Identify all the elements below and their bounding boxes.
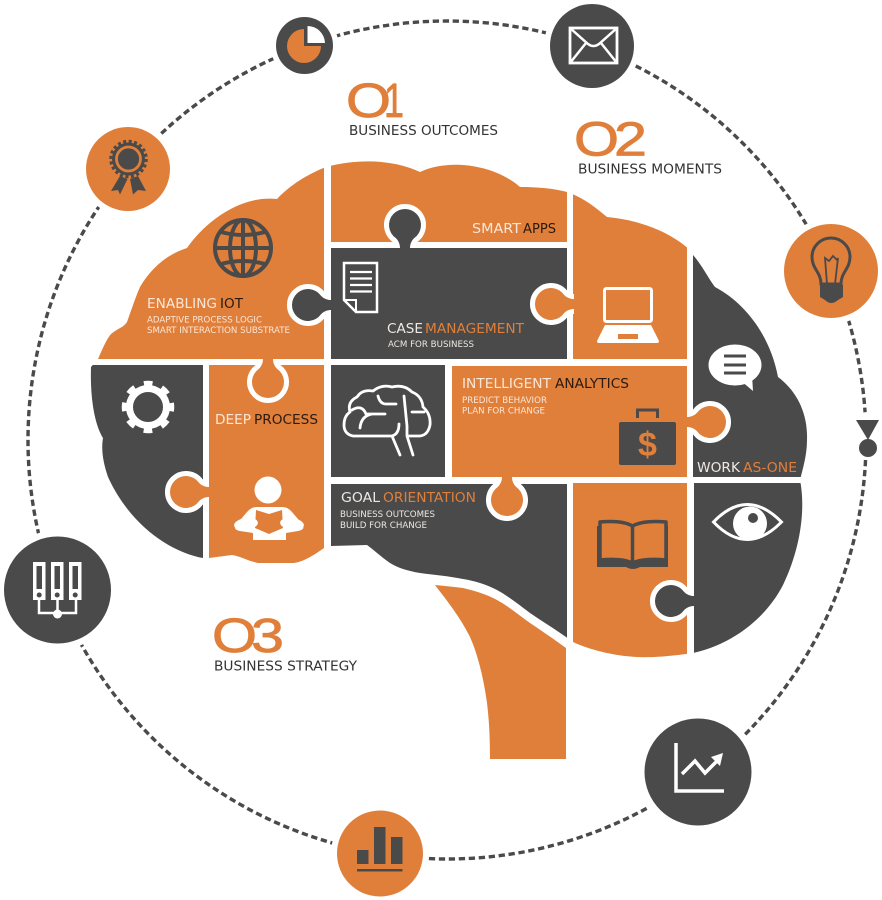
label: intelligent analytics: PREDICT BEHAVIOR: [462, 395, 547, 405]
icon: speech bubble: [708, 344, 762, 391]
label: enabling iot: IOT: [220, 297, 243, 312]
icon: open book: [597, 522, 668, 569]
puzzle tab: analytics into work as-one: [685, 406, 726, 438]
heading: 03 business strategy: BUSINESS STRATEGY: [214, 660, 357, 674]
label: deep process: DEEP: [215, 413, 251, 428]
label: enabling iot: ADAPTIVE PROCESS LOGIC: [147, 314, 262, 324]
label: enabling iot: [147, 297, 290, 335]
heading: 02 business moments: O: [574, 114, 619, 166]
puzzle tab: laptop into case: [535, 288, 576, 320]
label: smart apps: SMART: [472, 222, 521, 237]
icon: timeline marker: [844, 412, 882, 460]
label: intelligent analytics: [462, 377, 629, 416]
icon: globe: [215, 220, 271, 276]
panel: brain icon tile: [331, 365, 445, 477]
panel: intelligent analytics: [452, 366, 726, 516]
icon: envelope badge: [544, 0, 640, 94]
label: goal orientation: BUSINESS OUTCOMES: [340, 509, 435, 519]
heading: 02 business moments: [574, 114, 722, 178]
puzzle tab: case into smart apps: [389, 209, 421, 250]
heading: 01 business outcomes: BUSINESS OUTCOMES: [349, 124, 498, 139]
label: goal orientation: ORIENTATION: [383, 491, 476, 506]
heading: 03 business strategy: O: [212, 610, 257, 663]
label: work as-one: WORK: [697, 461, 740, 476]
panel: goal orientation: [331, 484, 567, 644]
icon: reader: [233, 476, 305, 540]
icon: document: [344, 263, 377, 312]
icon: pie chart badge: [270, 12, 338, 80]
panel: enabling iot: [90, 160, 324, 398]
panel: deep process: [170, 365, 324, 565]
heading: 02 business moments: 2: [614, 114, 647, 166]
label: smart apps: [472, 222, 556, 237]
heading: 02 business moments: BUSINESS MOMENTS: [578, 162, 722, 178]
puzzle tab: deep process into gear: [170, 476, 211, 508]
label: enabling iot: ENABLING: [147, 297, 217, 312]
heading: 01 business outcomes: O: [346, 75, 391, 128]
panel: case management: [292, 209, 567, 359]
icon: briefcase: $: [638, 426, 657, 464]
puzzle tab: enabling into deep process: [252, 357, 284, 398]
icon: gear: [124, 384, 172, 430]
panel: book: [573, 483, 687, 663]
icon: binders badge: [0, 530, 118, 650]
label: intelligent analytics: ANALYTICS: [555, 377, 629, 392]
panel: gear: [90, 365, 203, 558]
label: smart apps: APPS: [523, 222, 556, 237]
icon: eye: [714, 504, 782, 540]
label: deep process: PROCESS: [254, 413, 318, 428]
label: intelligent analytics: INTELLIGENT: [462, 377, 551, 392]
label: deep process: [215, 413, 318, 428]
panel: eye: [655, 483, 814, 658]
label: goal orientation: [340, 491, 476, 530]
label: case management: ACM FOR BUSINESS: [388, 339, 474, 349]
icon: light bulb badge: [778, 218, 882, 324]
label: work as-one: AS-ONE: [743, 461, 797, 476]
heading: 01 business outcomes: 1: [384, 75, 404, 128]
puzzle tab: analytics into goal: [491, 475, 523, 516]
label: goal orientation: BUILD FOR CHANGE: [340, 520, 427, 530]
heading: 03 business strategy: 3: [251, 610, 284, 663]
heading: 01 business outcomes: [346, 75, 498, 139]
icon: brain: [344, 386, 430, 455]
label: enabling iot: SMART INTERACTION SUBSTRATE: [147, 325, 290, 335]
icon: award ribbon badge: [80, 121, 176, 217]
panel: smart apps: [331, 161, 567, 242]
icon: briefcase: [619, 410, 676, 465]
label: work as-one: [697, 461, 797, 476]
label: goal orientation: GOAL: [341, 491, 381, 506]
label: case management: CASE: [387, 322, 423, 337]
brain stem: [435, 585, 566, 759]
panel: work as-one: [693, 250, 813, 477]
label: case management: MANAGEMENT: [425, 322, 524, 337]
label: case management: [387, 322, 524, 349]
icon: laptop: [597, 288, 659, 343]
icon: bar chart badge: [331, 804, 429, 900]
label: intelligent analytics: PLAN FOR CHANGE: [462, 406, 545, 416]
icon: growth chart badge: [638, 712, 758, 832]
panel: laptop: [535, 180, 687, 359]
puzzle tab: case into enabling: [292, 289, 333, 321]
heading: 03 business strategy: [212, 610, 357, 674]
puzzle tab: eye into book: [655, 585, 696, 617]
